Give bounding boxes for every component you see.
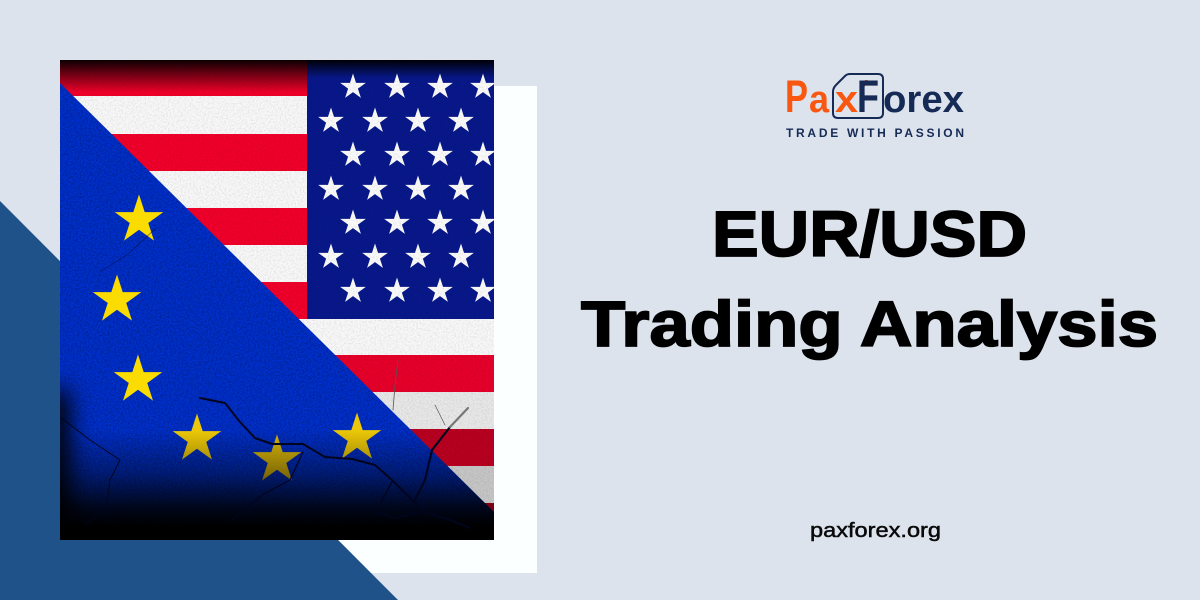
flag image: EU and US flags split diagonally <box>40 60 496 560</box>
US stars <box>318 74 496 302</box>
top edge shading on red stripe <box>60 60 307 92</box>
heavier grain on EU field <box>60 84 476 502</box>
logo accent slash <box>861 80 868 88</box>
logo a: a <box>809 79 830 121</box>
website url: paxforex.org <box>810 520 941 542</box>
wall cracks <box>60 228 470 528</box>
logo: PaxForex <box>785 71 964 140</box>
logo F: F <box>857 71 879 122</box>
title <box>581 198 1158 360</box>
US canton <box>307 60 494 319</box>
EU gold stars <box>93 194 381 481</box>
logo P: P <box>785 71 808 122</box>
title: EUR/USD <box>712 198 1027 270</box>
logo x: x <box>835 79 858 121</box>
logo orex: orex <box>883 79 964 121</box>
US stripes <box>60 60 494 540</box>
bottom shading on EU field <box>60 430 494 540</box>
white backing panel <box>300 86 537 573</box>
logo tagline: TRADE WITH PASSION <box>786 126 964 140</box>
left edge shading low on EU field <box>60 372 90 518</box>
logo rounded frame <box>833 74 883 118</box>
EU blue triangle <box>60 83 494 540</box>
canton top shading <box>307 60 494 78</box>
navy corner triangle <box>0 201 398 600</box>
title: Trading Analysis <box>581 288 1158 360</box>
light grain over whole flag <box>60 60 494 540</box>
